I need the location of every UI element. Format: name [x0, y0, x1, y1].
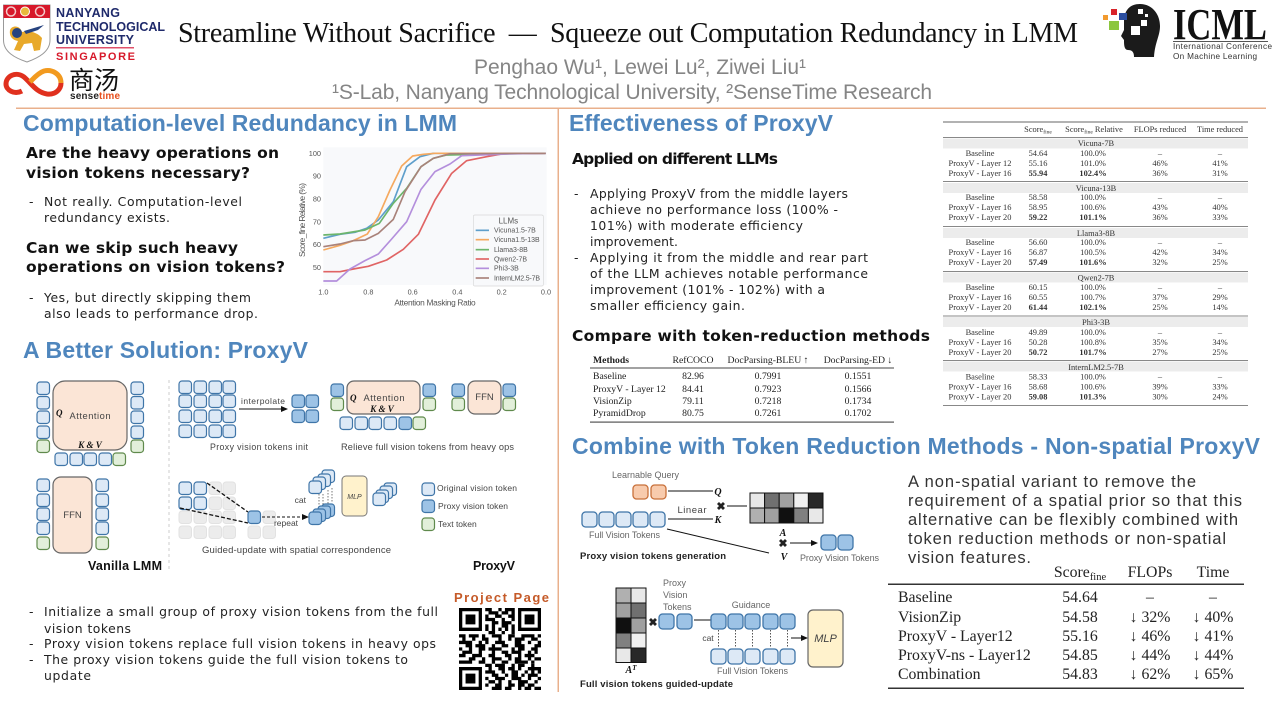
text block: ProxyV bullets: Initialize a small group of proxy vision tokens from the full [44, 604, 438, 619]
table: combination results: fine [1090, 572, 1106, 583]
table: per-LLM results: Baseline [966, 193, 995, 202]
guided update: cat [295, 495, 307, 505]
logo: ICML [1103, 0, 1272, 61]
relieve heavy ops: Attention [364, 393, 404, 403]
table: per-LLM results: ProxyV - Layer 20 [949, 258, 1011, 267]
title: Streamline Without Sacrifice — Squeeze out Computation Redundancy in LMM [178, 18, 1078, 49]
question 1: vision tokens necessary? [26, 164, 250, 182]
table: token-reduction comparison: Methods [593, 355, 629, 366]
table: per-LLM results: 100.0% [1080, 193, 1106, 202]
answer 1: redundancy exists. [44, 210, 170, 225]
table: per-LLM results: 101.3% [1079, 392, 1107, 402]
table: per-LLM results: 33% [1212, 382, 1228, 392]
line chart: score vs attention masking ratio: 60 [313, 240, 321, 249]
table: per-LLM results: 36% [1152, 169, 1168, 178]
table: per-LLM results: fine [1084, 128, 1093, 136]
table: per-LLM results: Vicuna-7B [1078, 139, 1115, 148]
table: per-LLM results: 61.44 [1029, 303, 1048, 312]
table: combination results: Baseline [898, 589, 952, 606]
table: per-LLM results: 60.15 [1029, 283, 1047, 292]
table: per-LLM results: ProxyV - Layer 20 [949, 213, 1011, 222]
affiliations: ¹S-Lab, Nanyang Technological University, ²SenseTime Research [332, 81, 932, 104]
table: per-LLM results: fine [1043, 128, 1052, 136]
proxy init [179, 381, 318, 452]
table: token-reduction comparison: 0.1566 [845, 384, 871, 395]
table: per-LLM results: – [1157, 283, 1163, 292]
heading: Computation-level Redundancy in LMM [23, 110, 457, 136]
heading: non-spatial ProxyV: Combine with Token Reduction Methods - Non-spatial ProxyV [572, 433, 1261, 459]
logo: ICML: International Conference [1173, 42, 1272, 51]
text block: effectiveness bullets: improvement (101% - 102%) with a [590, 282, 825, 297]
question 2: Can we skip such heavy [26, 239, 238, 257]
table: combination results: ProxyV-ns - Layer12 [898, 647, 1031, 664]
line chart: score vs attention masking ratio: 100 [309, 149, 321, 158]
table: per-LLM results: Relative [1093, 125, 1123, 134]
text block: non-spatial description: requirement of a spatial prior so that this [908, 492, 1242, 510]
table: per-LLM results: 102.1% [1079, 303, 1107, 312]
text block: non-spatial description: A non-spatial variant to remove the [908, 473, 1196, 491]
divider: horizontal rule [16, 108, 1266, 109]
table: combination results: – [1145, 589, 1154, 606]
table: per-LLM results: – [1217, 283, 1223, 292]
table: per-LLM results: ProxyV - Layer 20 [949, 348, 1011, 357]
table: per-LLM results: 55.16 [1029, 159, 1047, 168]
table: per-LLM results: 58.33 [1029, 372, 1047, 382]
subheading: compare with token-reduction methods: Compare with token-reduction methods [572, 327, 930, 345]
table: per-LLM results: 42% [1152, 248, 1168, 257]
logo: SenseTime: 商汤 [69, 67, 119, 95]
guided update: MLP [347, 494, 362, 501]
table: per-LLM results: ProxyV - Layer 16 [949, 203, 1011, 212]
answer 1: - [29, 194, 33, 209]
text block: ProxyV bullets: - [29, 652, 33, 667]
table: token-reduction comparison: VisionZip [593, 396, 632, 407]
table: combination results: ↓ 46% [1130, 628, 1170, 645]
table: per-LLM results: 100.0% [1080, 328, 1106, 337]
text block: ProxyV bullets: vision tokens [44, 621, 131, 636]
panel: computation-level redundancy [23, 110, 457, 321]
table: per-LLM results: 41% [1212, 159, 1228, 168]
table: per-LLM results: 34% [1212, 248, 1228, 257]
table: combination results: ↓ 44% [1130, 647, 1170, 664]
table: per-LLM results: 24% [1212, 392, 1228, 402]
diagram: vanilla LMM [37, 381, 162, 573]
chart legend: Qwen2-7B [494, 256, 527, 263]
proxy init: interpolate [241, 396, 285, 406]
table: per-LLM results: – [1157, 149, 1163, 158]
answer 2: Yes, but directly skipping them [43, 290, 251, 305]
table: combination results: 54.64 [1062, 589, 1098, 606]
table: per-LLM results: ProxyV - Layer 16 [949, 169, 1011, 178]
table: per-LLM results: 101.0% [1080, 159, 1106, 168]
text block: effectiveness bullets: achieve no performance loss (100% - [590, 202, 838, 217]
table: per-LLM results [943, 122, 1248, 406]
text block: ProxyV bullets: The proxy vision tokens guide the full vision tokens to [43, 652, 408, 667]
table: per-LLM results: 58.68 [1029, 382, 1047, 392]
table: per-LLM results: – [1157, 238, 1163, 247]
text block: non-spatial description: alternative can be flexibly combined with [908, 511, 1238, 529]
table: per-LLM results: 100.5% [1080, 248, 1106, 257]
table: per-LLM results: 50.72 [1029, 348, 1047, 357]
diagram: full vision tokens guided-update: Full Vision Tokens [717, 666, 788, 676]
table: per-LLM results: Baseline [966, 283, 995, 292]
logo: SenseTime: sensetime [70, 91, 120, 102]
proxy init: Proxy vision tokens init [210, 442, 309, 452]
table: per-LLM results: – [1157, 193, 1163, 202]
project page QR [454, 590, 549, 688]
question 2: operations on vision tokens? [26, 258, 285, 276]
FFN block [37, 477, 108, 553]
table: per-LLM results: 58.58 [1029, 193, 1047, 202]
table: per-LLM results: – [1217, 328, 1223, 337]
table: per-LLM results: 100.7% [1080, 293, 1106, 302]
table: combination results: 54.58 [1062, 609, 1098, 626]
table: combination results: Time [1197, 564, 1229, 581]
line chart: score vs attention masking ratio: 0.6 [408, 287, 418, 296]
table: per-LLM results: 59.08 [1029, 392, 1047, 402]
table: per-LLM results: 46% [1152, 159, 1168, 168]
text block: effectiveness bullets: 101%) with moderate efficiency [590, 218, 803, 233]
table: combination results: VisionZip [898, 609, 961, 626]
line chart: score vs attention masking ratio: 1.0 [318, 287, 328, 296]
table: per-LLM results: 39% [1152, 382, 1168, 392]
QR code [459, 610, 541, 688]
table: per-LLM results: 55.94 [1029, 169, 1048, 178]
table: combination results: ProxyV - Layer12 [898, 628, 1013, 645]
table: per-LLM results: 100.0% [1080, 372, 1106, 382]
line chart: score vs attention masking ratio: Attention Masking Ratio [394, 298, 476, 308]
token legend: Text token [438, 519, 477, 529]
table: per-LLM results: 100.0% [1080, 238, 1106, 247]
line chart: score vs attention masking ratio: 0.0 [541, 287, 551, 296]
diagram: full vision tokens guided-update: Tokens [663, 602, 692, 612]
attention block: Q [56, 408, 63, 418]
line chart: score vs attention masking ratio: 0.8 [363, 287, 373, 296]
line chart: score vs attention masking ratio: 0.2 [497, 287, 507, 296]
table: per-LLM results: 100.6% [1080, 382, 1106, 392]
table: per-LLM results: 54.64 [1029, 149, 1048, 158]
table: per-LLM results: – [1157, 328, 1163, 337]
diagram: full vision tokens guided-update: T [632, 664, 637, 672]
table: token-reduction comparison: PyramidDrop [593, 408, 646, 419]
answer 2: - [29, 290, 33, 305]
table: per-LLM results: 100.6% [1080, 203, 1106, 212]
table: per-LLM results: Qwen2-7B [1078, 274, 1115, 282]
table: per-LLM results: 27% [1152, 348, 1168, 357]
table: per-LLM results: 100.0% [1080, 149, 1106, 158]
table: per-LLM results: – [1157, 372, 1163, 382]
authors: Penghao Wu¹, Lewei Lu², Ziwei Liu¹ [474, 56, 806, 79]
attention block [37, 381, 144, 466]
token legend: Original vision token [437, 483, 517, 493]
logo: NTU Singapore [4, 5, 165, 63]
guided update: Guided-update with spatial correspondence [202, 545, 391, 556]
diagram: proxy vision tokens generation: A [779, 528, 787, 539]
logo: ICML: On Machine Learning [1173, 52, 1257, 61]
chart legend: Phi3-3B [494, 266, 519, 273]
table: per-LLM results: 58.95 [1029, 203, 1047, 212]
diagram: proxy vision tokens generation: Linear [678, 505, 706, 516]
table: per-LLM results: 40% [1212, 203, 1228, 212]
line chart: score vs attention masking ratio: 80 [313, 195, 321, 204]
logo: NTU Singapore: TECHNOLOGICAL [56, 20, 165, 34]
token legend [422, 483, 517, 530]
table: per-LLM results: ProxyV - Layer 16 [949, 382, 1011, 392]
table: token-reduction comparison: 0.1734 [845, 396, 871, 407]
table: per-LLM results: 57.49 [1029, 258, 1047, 267]
chart legend: Llama3-8B [494, 247, 528, 254]
table: per-LLM results: 30% [1152, 392, 1168, 402]
table: per-LLM results: 34% [1212, 338, 1228, 347]
diagram: full vision tokens guided-update: A [626, 665, 632, 676]
table: per-LLM results: 56.87 [1029, 248, 1047, 257]
table: token-reduction comparison: 79.11 [682, 396, 704, 407]
line chart: score vs attention masking ratio: 70 [313, 217, 321, 226]
text block: non-spatial description: token reduction methods or non-spatial [908, 530, 1226, 548]
table: per-LLM results: Baseline [966, 372, 995, 382]
diagram: proxy vision tokens generation: V [781, 552, 789, 563]
guided update [179, 470, 396, 556]
heading: effectiveness of ProxyV: Effectiveness of ProxyV [569, 110, 834, 136]
table: per-LLM results: ProxyV - Layer 16 [949, 293, 1011, 302]
table: combination results: ↓ 44% [1193, 647, 1233, 664]
diagram: full vision tokens guided-update: Full vision tokens guided-update [580, 679, 733, 690]
table: per-LLM results: Score [1065, 125, 1123, 136]
divider: vertical rule [558, 108, 559, 692]
table: per-LLM results: 32% [1152, 258, 1168, 267]
text block: ProxyV bullets: - [29, 604, 33, 619]
subheading: applied on different LLMs: Applied on different LLMs [572, 150, 778, 168]
label: Vanilla LMM [88, 559, 162, 573]
attention block: K & V [77, 440, 103, 450]
attention block: Attention [70, 411, 110, 421]
table: per-LLM results: 101.1% [1079, 213, 1107, 222]
table: per-LLM results: Baseline [966, 238, 995, 247]
table: combination results: ↓ 40% [1193, 609, 1233, 626]
table: per-LLM results: 49.89 [1029, 328, 1047, 337]
text block: non-spatial description: vision features. [908, 549, 1031, 567]
table: per-LLM results: Baseline [966, 149, 995, 158]
table: per-LLM results: 102.4% [1079, 169, 1107, 178]
table: token-reduction comparison: 0.7923 [755, 384, 781, 395]
table: token-reduction comparison: RefCOCO [673, 355, 713, 366]
table: per-LLM results: ProxyV - Layer 16 [949, 338, 1011, 347]
line chart: score vs attention masking ratio: 0.4 [452, 287, 462, 296]
question 1: Are the heavy operations on [26, 144, 279, 162]
attention heatmap [750, 493, 823, 523]
table: token-reduction comparison: 0.1702 [845, 408, 871, 419]
table: token-reduction comparison: ProxyV - Layer 12 [593, 384, 666, 395]
diagram: full vision tokens guided-update: Vision [663, 590, 687, 600]
table: per-LLM results: – [1217, 149, 1223, 158]
dashed separator [168, 380, 170, 572]
table: combination results: Combination [898, 666, 981, 683]
table: per-LLM results: 29% [1212, 293, 1228, 302]
table: combination results: ↓ 62% [1130, 666, 1170, 683]
table: per-LLM results: 100.0% [1080, 283, 1106, 292]
diagram: proxy vision tokens generation: Full Vision Tokens [589, 530, 660, 540]
text block: ProxyV bullets: - [29, 636, 33, 651]
diagram: proxy vision tokens generation: Proxy vision tokens generation [580, 551, 726, 562]
logo: NTU Singapore: NANYANG [56, 6, 120, 20]
table: per-LLM results: 56.60 [1029, 238, 1047, 247]
table: combination results: ↓ 65% [1193, 666, 1233, 683]
table: per-LLM results: 25% [1212, 258, 1228, 267]
diagram: proxy vision tokens generation: Learnable Query [612, 470, 680, 480]
table: token-reduction comparison [590, 355, 894, 423]
relieve heavy ops [331, 381, 516, 452]
diagram: proxy vision tokens generation: Proxy Vision Tokens [800, 553, 880, 563]
table: per-LLM results: Score [1024, 125, 1052, 136]
table: combination results: 54.83 [1062, 666, 1098, 683]
diagram: full vision tokens guided-update: Guidance [732, 600, 770, 610]
table: per-LLM results: 25% [1212, 348, 1228, 357]
relieve heavy ops: Q [350, 393, 357, 403]
line chart: score vs attention masking ratio [297, 147, 551, 308]
table: token-reduction comparison: 0.1551 [845, 371, 871, 382]
table: token-reduction comparison: 84.41 [682, 384, 704, 395]
table: combination results [888, 564, 1244, 689]
token legend: Proxy vision token [438, 501, 508, 511]
table: per-LLM results: 60.55 [1029, 293, 1047, 302]
table: per-LLM results: Time reduced [1197, 125, 1244, 134]
text block: effectiveness bullets: improvement. [590, 234, 678, 249]
answer 1: Not really. Computation-level [44, 194, 242, 209]
relieve heavy ops: FFN [475, 392, 494, 403]
table: token-reduction comparison: 82.96 [682, 371, 704, 382]
line chart: score vs attention masking ratio: Score_fine Relative (%) [297, 183, 307, 257]
table: combination results: 54.85 [1062, 647, 1098, 664]
table: per-LLM results: ProxyV - Layer 16 [949, 248, 1011, 257]
diagram: proxy vision tokens generation: K [714, 515, 723, 526]
text block: effectiveness bullets: - [574, 186, 578, 201]
label: ProxyV [473, 559, 516, 573]
text block: effectiveness bullets: smaller efficiency gain. [590, 298, 745, 313]
diagram: proxy vision tokens generation: Q [714, 487, 722, 498]
chart legend: Vicuna1.5-13B [494, 237, 540, 244]
FFN block: FFN [63, 510, 82, 521]
heading: a better solution: A Better Solution: ProxyV [23, 337, 309, 363]
diagram: ProxyV [179, 381, 517, 573]
chart legend: Vicuna1.5-7B [494, 228, 536, 235]
text block: effectiveness bullets: - [574, 250, 578, 265]
chart legend [473, 215, 543, 286]
diagram: full vision tokens guided-update: cat [702, 633, 714, 643]
table: per-LLM results: – [1217, 193, 1223, 202]
logo: NTU Singapore: SINGAPORE [56, 51, 135, 63]
diagram: proxy vision tokens generation [580, 470, 880, 563]
table: per-LLM results: – [1217, 238, 1223, 247]
diagram: proxy vision tokens generation: ✖ [778, 538, 788, 550]
table: per-LLM results: Phi3-3B [1082, 318, 1110, 327]
table: per-LLM results: 31% [1212, 169, 1228, 178]
table: combination results: 55.16 [1062, 628, 1098, 645]
table: per-LLM results: ProxyV - Layer 20 [949, 392, 1011, 402]
diagram: full vision tokens guided-update: MLP [814, 633, 837, 645]
table: per-LLM results: 50.28 [1029, 338, 1047, 347]
text block: effectiveness bullets: of the LLM achieves notable performance [590, 266, 868, 281]
table: per-LLM results: 59.22 [1029, 213, 1047, 222]
diagram: proxy vision tokens generation: ✖ [716, 501, 726, 513]
table: token-reduction comparison: DocParsing-BLEU ↑ [728, 355, 808, 366]
text block: ProxyV bullets: update [44, 668, 91, 683]
table: token-reduction comparison: DocParsing-ED ↓ [824, 355, 892, 366]
chart legend: LLMs [499, 216, 518, 225]
transposed heatmap [616, 588, 646, 662]
table: per-LLM results: FLOPs reduced [1134, 125, 1187, 134]
table: per-LLM results: Llama3-8B [1077, 229, 1115, 238]
table: per-LLM results: Baseline [966, 328, 995, 337]
line chart: score vs attention masking ratio: 90 [313, 172, 321, 181]
table: token-reduction comparison: Baseline [593, 371, 626, 382]
relieve heavy ops: K & V [369, 404, 395, 414]
table: token-reduction comparison: 0.7218 [755, 396, 781, 407]
table: per-LLM results: 33% [1212, 213, 1228, 222]
table: per-LLM results: ProxyV - Layer 12 [949, 159, 1011, 168]
table: per-LLM results: 100.8% [1080, 338, 1106, 347]
table: per-LLM results: 35% [1152, 338, 1168, 347]
table: combination results: ↓ 32% [1130, 609, 1170, 626]
logo: ICML: ICML [1173, 0, 1267, 49]
table: per-LLM results: 37% [1152, 293, 1168, 302]
diagram: full vision tokens guided-update: ✖ [648, 617, 658, 629]
line chart: score vs attention masking ratio: 50 [313, 263, 321, 272]
table: per-LLM results: 101.6% [1079, 258, 1107, 267]
logo: SenseTime [6, 67, 120, 102]
table: per-LLM results: 25% [1152, 303, 1168, 312]
answer 2: also leads to performance drop. [44, 306, 258, 321]
project page QR: Project Page [454, 590, 549, 605]
guided update: repeat [274, 518, 299, 528]
table: token-reduction comparison: 0.7991 [755, 371, 781, 382]
table: per-LLM results: 101.7% [1079, 348, 1107, 357]
text block: ProxyV bullets: Proxy vision tokens replace full vision tokens in heavy ops [44, 636, 436, 651]
table: token-reduction comparison: 80.75 [682, 408, 704, 419]
logo: NTU Singapore: UNIVERSITY [56, 33, 135, 47]
table: per-LLM results: Vicuna-13B [1076, 184, 1117, 193]
table: per-LLM results: 14% [1212, 303, 1228, 312]
chart legend: InternLM2.5-7B [494, 275, 540, 282]
table: per-LLM results: – [1217, 372, 1223, 382]
text block: effectiveness bullets: Applying ProxyV from the middle layers [590, 186, 848, 201]
table: combination results: Score [1054, 564, 1106, 583]
relieve heavy ops: Relieve full vision tokens from heavy ops [341, 442, 514, 452]
table: combination results: ↓ 41% [1193, 628, 1233, 645]
table: per-LLM results: InternLM2.5-7B [1068, 363, 1124, 372]
table: token-reduction comparison: 0.7261 [755, 408, 781, 419]
text block: effectiveness bullets: Applying it from the middle and rear part [590, 250, 868, 265]
table: combination results: – [1208, 589, 1217, 606]
table: per-LLM results: 43% [1152, 203, 1168, 212]
diagram: full vision tokens guided-update [580, 578, 843, 690]
table: per-LLM results: ProxyV - Layer 20 [949, 303, 1011, 312]
table: per-LLM results: 36% [1152, 213, 1168, 222]
table: combination results: FLOPs [1128, 564, 1172, 581]
diagram: full vision tokens guided-update: Proxy [663, 578, 687, 588]
